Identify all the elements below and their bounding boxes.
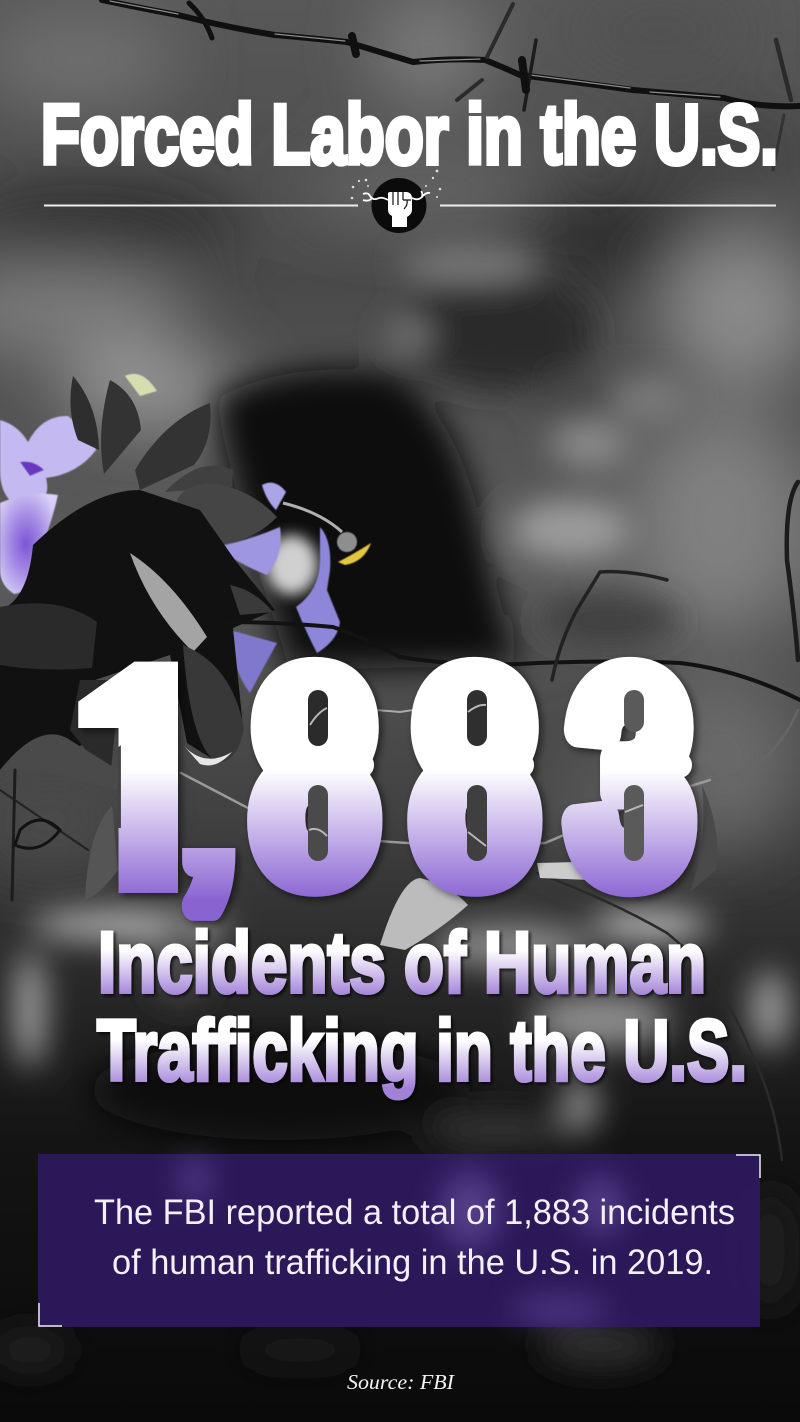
thorny vines bbox=[0, 482, 800, 1160]
description text: of human trafficking in the U.S. in 2019. bbox=[112, 1243, 713, 1282]
left flowers bbox=[0, 416, 96, 594]
digits 883: 883 bbox=[254, 616, 692, 938]
pale leaves near number bbox=[380, 785, 717, 950]
right flowers bbox=[217, 483, 340, 693]
halo behind flower bbox=[266, 535, 318, 595]
corner brackets bbox=[39, 1155, 760, 1326]
stem and bud bbox=[283, 503, 342, 532]
digit one: 1 bbox=[77, 618, 221, 936]
dark leaves bbox=[0, 376, 277, 900]
subtitle bbox=[97, 915, 747, 1099]
big number 1,883 bbox=[78, 656, 704, 928]
comma: , bbox=[179, 606, 238, 923]
panel: description bbox=[38, 1154, 760, 1327]
barbed wire top bbox=[102, 0, 800, 170]
description text: The FBI reported a total of 1,883 incidents bbox=[94, 1193, 735, 1232]
source note: Source: FBI bbox=[347, 1370, 455, 1394]
digit waist fill bbox=[262, 752, 692, 778]
description text bbox=[94, 1193, 735, 1282]
icon: raised fist breaking chains bbox=[351, 170, 441, 233]
flower cluster with leaves bbox=[0, 374, 371, 900]
title divider with icon bbox=[44, 170, 776, 233]
digit counters bbox=[308, 690, 644, 861]
